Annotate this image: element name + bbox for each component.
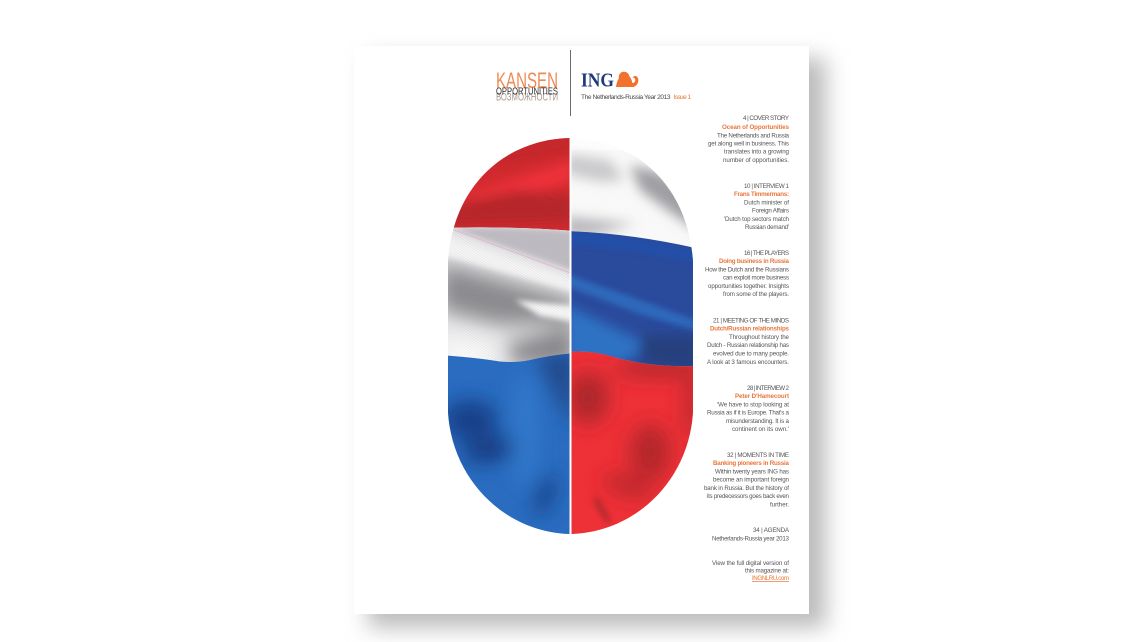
contents: moments in time: Banking pioneers in Russia [713, 460, 790, 467]
flag capsule [448, 138, 693, 534]
contents: moments in time: 32 | MOMENTS IN TIME [727, 452, 789, 459]
right half: Russian flag [572, 149, 693, 534]
contents: digital version link: INGNLRU.com [752, 575, 789, 582]
contents: cover story [708, 115, 790, 164]
centre white divider [570, 138, 572, 534]
contents: cover story: 4 | COVER STORY [743, 115, 789, 122]
contents: cover story: translates into a growing [724, 149, 790, 156]
vertical divider [570, 50, 571, 116]
page shadow [368, 58, 826, 628]
ING logo: ING [581, 70, 614, 92]
left half: Dutch flag [448, 138, 570, 534]
icon: ING lion [616, 72, 638, 87]
masthead logo: Kansen Opportunities: ВОЗМОЖНОСТИ [496, 92, 558, 104]
contents: moments in time: Within twenty years ING has [715, 468, 789, 476]
contents: interview 1: Foreign Affairs [752, 208, 789, 215]
contents: moments in time [704, 452, 790, 508]
masthead logo: Kansen Opportunities: OPPORTUNITIES [496, 86, 558, 98]
contents: digital version link [712, 560, 789, 582]
contents: meeting of the minds: 21 | MEETING OF THE MINDS [713, 317, 789, 324]
contents: moments in time: further. [770, 502, 789, 508]
contents: interview 2 [707, 385, 790, 433]
contents: interview 1: 'Dutch top sectors match [724, 216, 790, 223]
contents: interview 2: continent on its own.' [732, 426, 789, 433]
contents: the players: 16 | THE PLAYERS [744, 250, 789, 257]
contents: interview 1: Russian demand' [745, 224, 789, 231]
issue line: Issue 1 [674, 94, 691, 101]
contents: meeting of the minds: evolved due to many people. [713, 350, 789, 358]
contents: interview 1 [724, 183, 790, 231]
contents: cover story: number of opportunities. [723, 157, 789, 164]
contents: moments in time: bank in Russia. But the history of [704, 485, 789, 492]
contents: agenda: 34 | AGENDA [753, 527, 790, 534]
contents: moments in time: become an important foreign [713, 477, 790, 484]
contents: moments in time: its predecessors goes back even [707, 493, 790, 500]
magazine cover infographic [356, 46, 838, 640]
contents: the players: can exploit more business [723, 275, 789, 282]
contents: interview 2: Russia as if it is Europe. That's a [707, 410, 790, 417]
contents: meeting of the minds: A look at 3 famous encounters. [707, 359, 789, 366]
contents: meeting of the minds [707, 317, 790, 366]
contents: meeting of the minds: Dutch - Russian relationship has [707, 342, 789, 349]
contents: cover story: The Netherlands and Russia [717, 132, 790, 139]
ING logo [581, 70, 638, 92]
contents: interview 2: 28 | INTERVIEW 2 [747, 385, 790, 392]
masthead logo: Kansen Opportunities: KANSEN [496, 68, 558, 93]
contents: interview 1: 10 | INTERVIEW 1 [744, 183, 790, 190]
contents: interview 2: misunderstanding. It is a [726, 418, 790, 425]
contents: cover story: get along well in business. This [708, 140, 789, 148]
contents: the players: from some of the players. [723, 291, 789, 298]
contents: meeting of the minds: Throughout history the [729, 334, 790, 341]
contents: the players: How the Dutch and the Russians [705, 266, 789, 274]
contents: agenda: Netherlands-Russia year 2013 [712, 535, 790, 542]
contents: the players: opportunities together. Insights [708, 283, 789, 290]
contents: cover story: Ocean of Opportunities [722, 124, 790, 131]
contents: interview 2: 'We have to stop looking at [717, 402, 789, 408]
issue line: The Netherlands-Russia Year 2013 [581, 94, 671, 101]
contents: digital version link: View the full digital version of [712, 560, 789, 567]
contents: interview 2: Peter D'Hamecourt [735, 393, 789, 400]
contents: agenda [712, 527, 790, 542]
contents: the players [705, 250, 790, 298]
masthead logo: Kansen Opportunities [496, 68, 558, 104]
contents: meeting of the minds: Dutch/Russian relationships [710, 326, 790, 332]
contents: interview 1: Dutch minister of [744, 200, 789, 206]
contents: the players: Doing business in Russia [719, 258, 790, 265]
contents: digital version link: this magazine at: [745, 568, 789, 574]
contents: interview 1: Frans Timmermans: [734, 191, 789, 198]
magazine page [354, 46, 809, 614]
